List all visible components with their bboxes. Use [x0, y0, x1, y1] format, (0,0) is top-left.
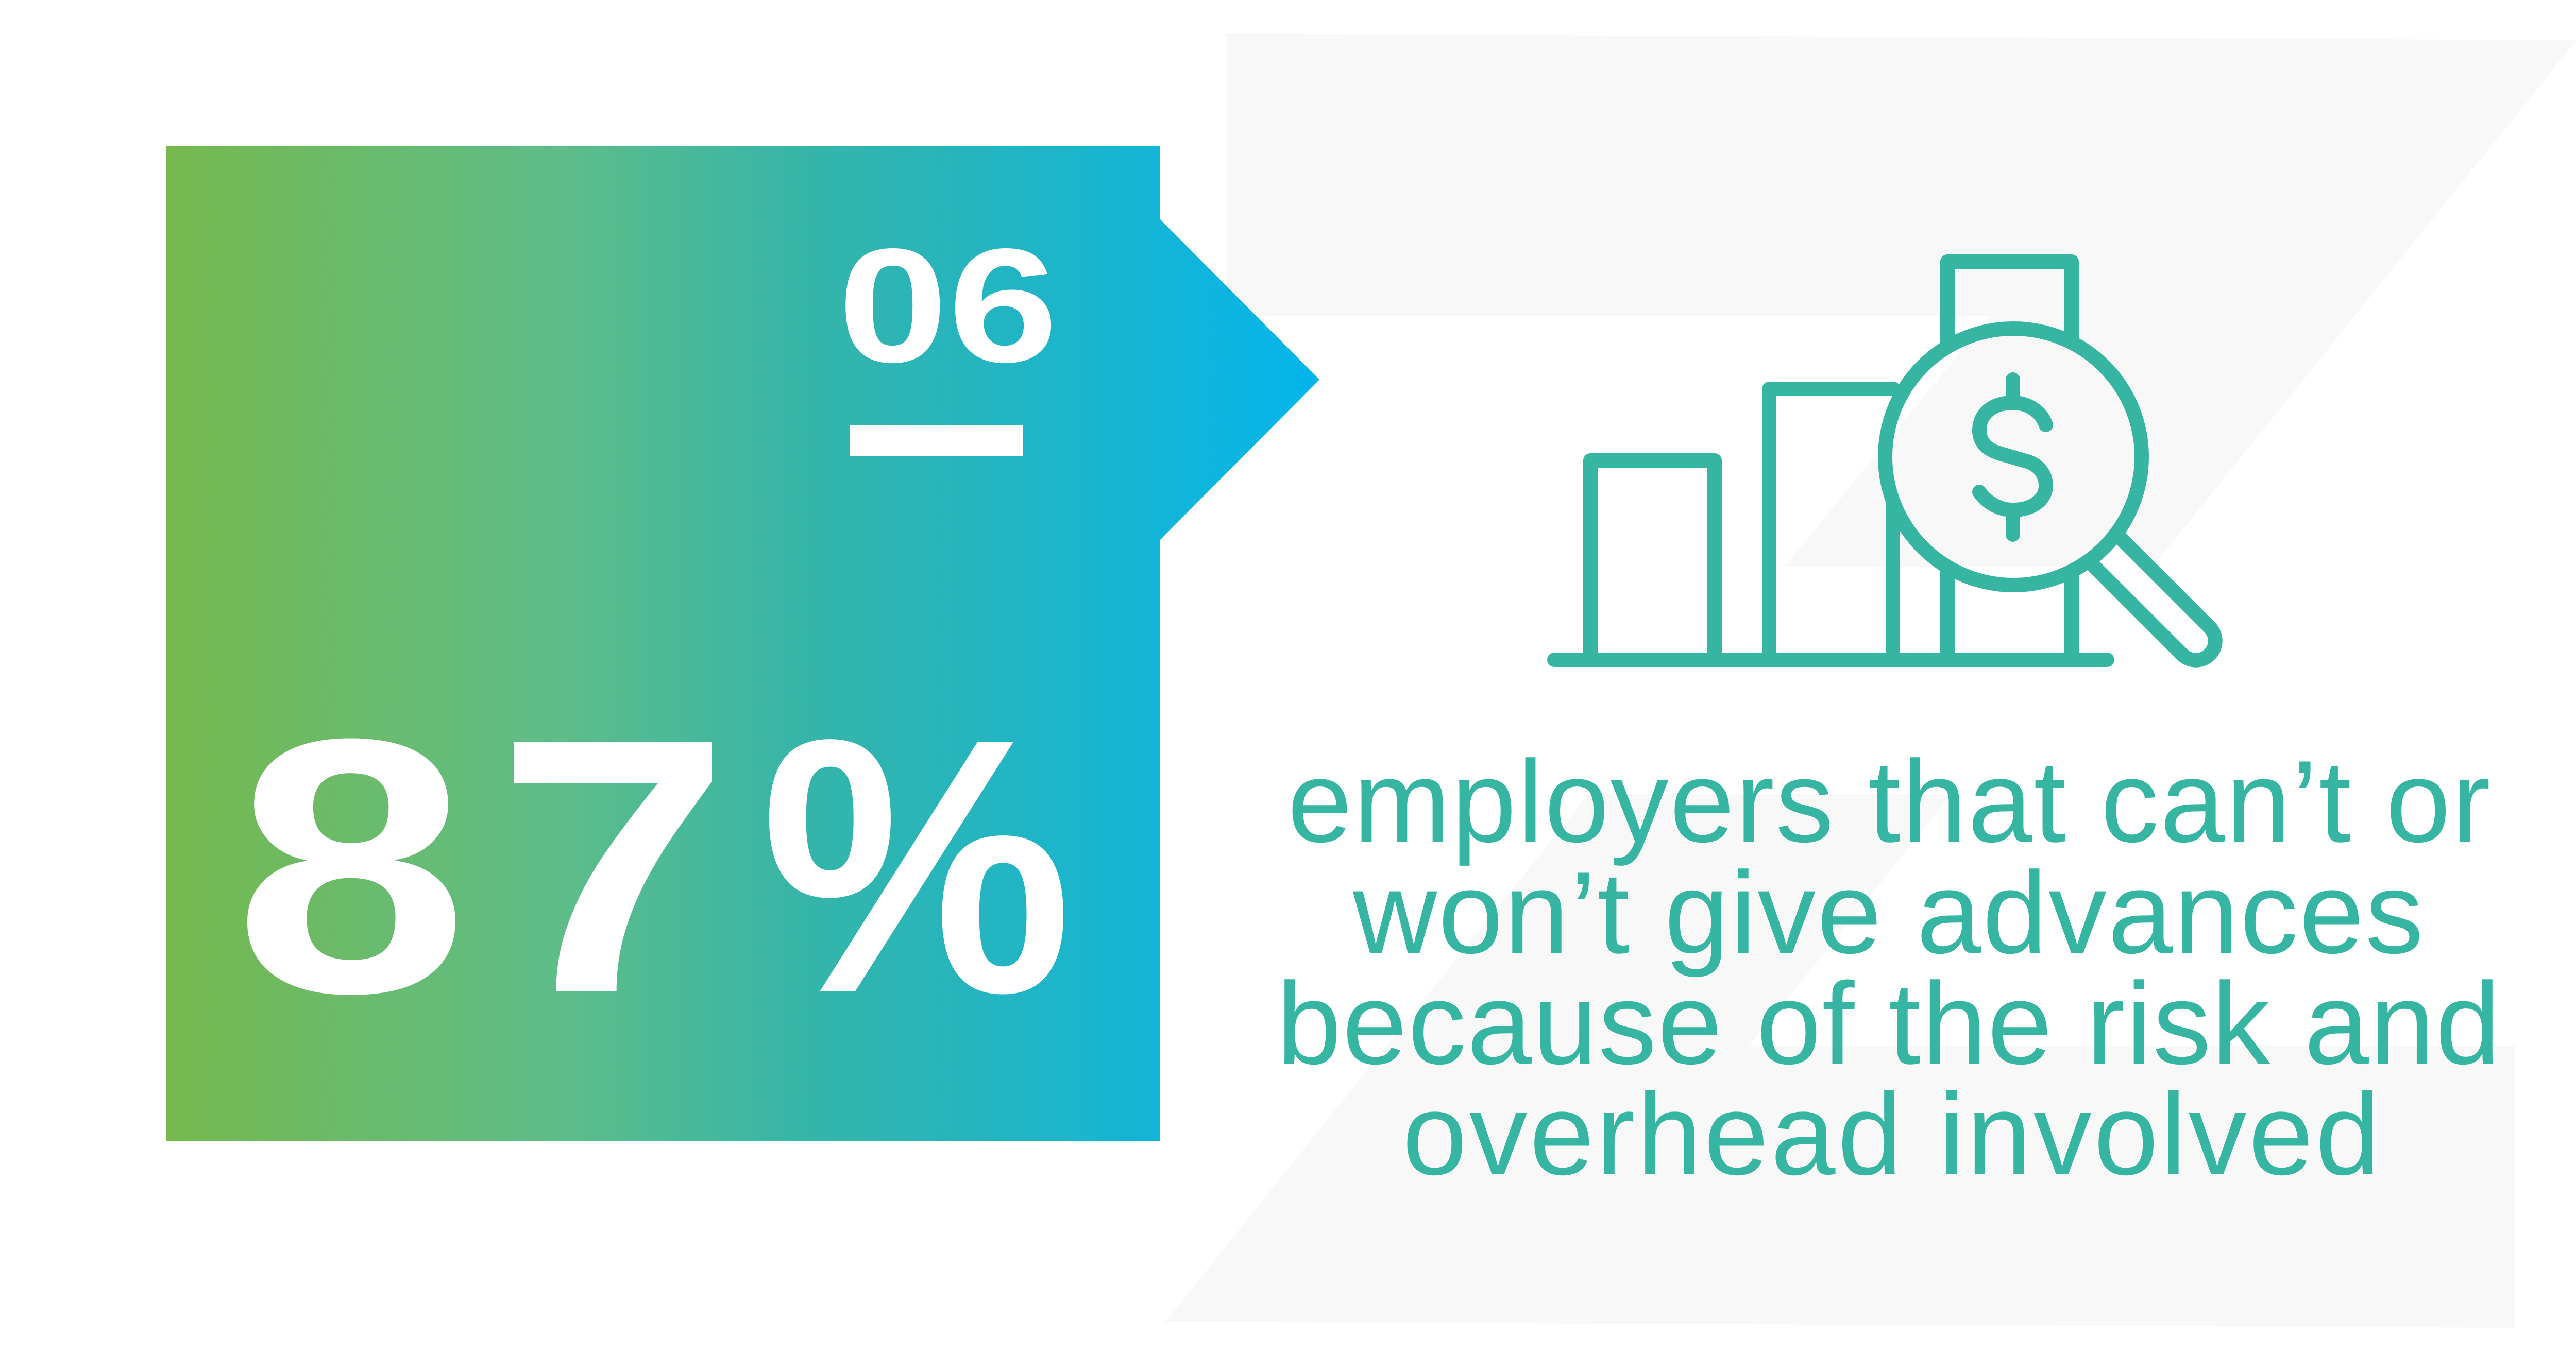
statistic description text — [1277, 736, 2500, 1199]
big statistic — [234, 664, 1073, 1069]
number underline bar — [850, 425, 1023, 456]
big statistic: % — [760, 664, 1073, 1069]
background shape: lower grey Z band — [1165, 794, 2515, 1328]
background shape: upper grey Z band — [1226, 33, 2576, 567]
statistic description text: because of the risk and — [1277, 958, 2500, 1088]
chart baseline — [1554, 653, 2107, 667]
dollar sign — [1979, 380, 2046, 535]
bar 1 — [1590, 460, 1715, 660]
statistic description text: overhead involved — [1402, 1069, 2380, 1199]
statistic description text: won’t give advances — [1352, 847, 2424, 978]
statistic description text: employers that can’t or — [1287, 736, 2490, 866]
icon: bar chart with magnifier and dollar sign — [1554, 262, 2215, 660]
magnifier handle — [2094, 539, 2215, 660]
bar 3 — [1947, 262, 2072, 660]
big statistic: 8 — [234, 664, 468, 1069]
bar 2 — [1769, 389, 1893, 660]
magnifier lens — [1885, 329, 2142, 585]
big statistic: 7 — [496, 664, 731, 1069]
panel number: 06 — [838, 215, 1058, 396]
panel: gradient arrow panel — [166, 146, 1319, 1141]
